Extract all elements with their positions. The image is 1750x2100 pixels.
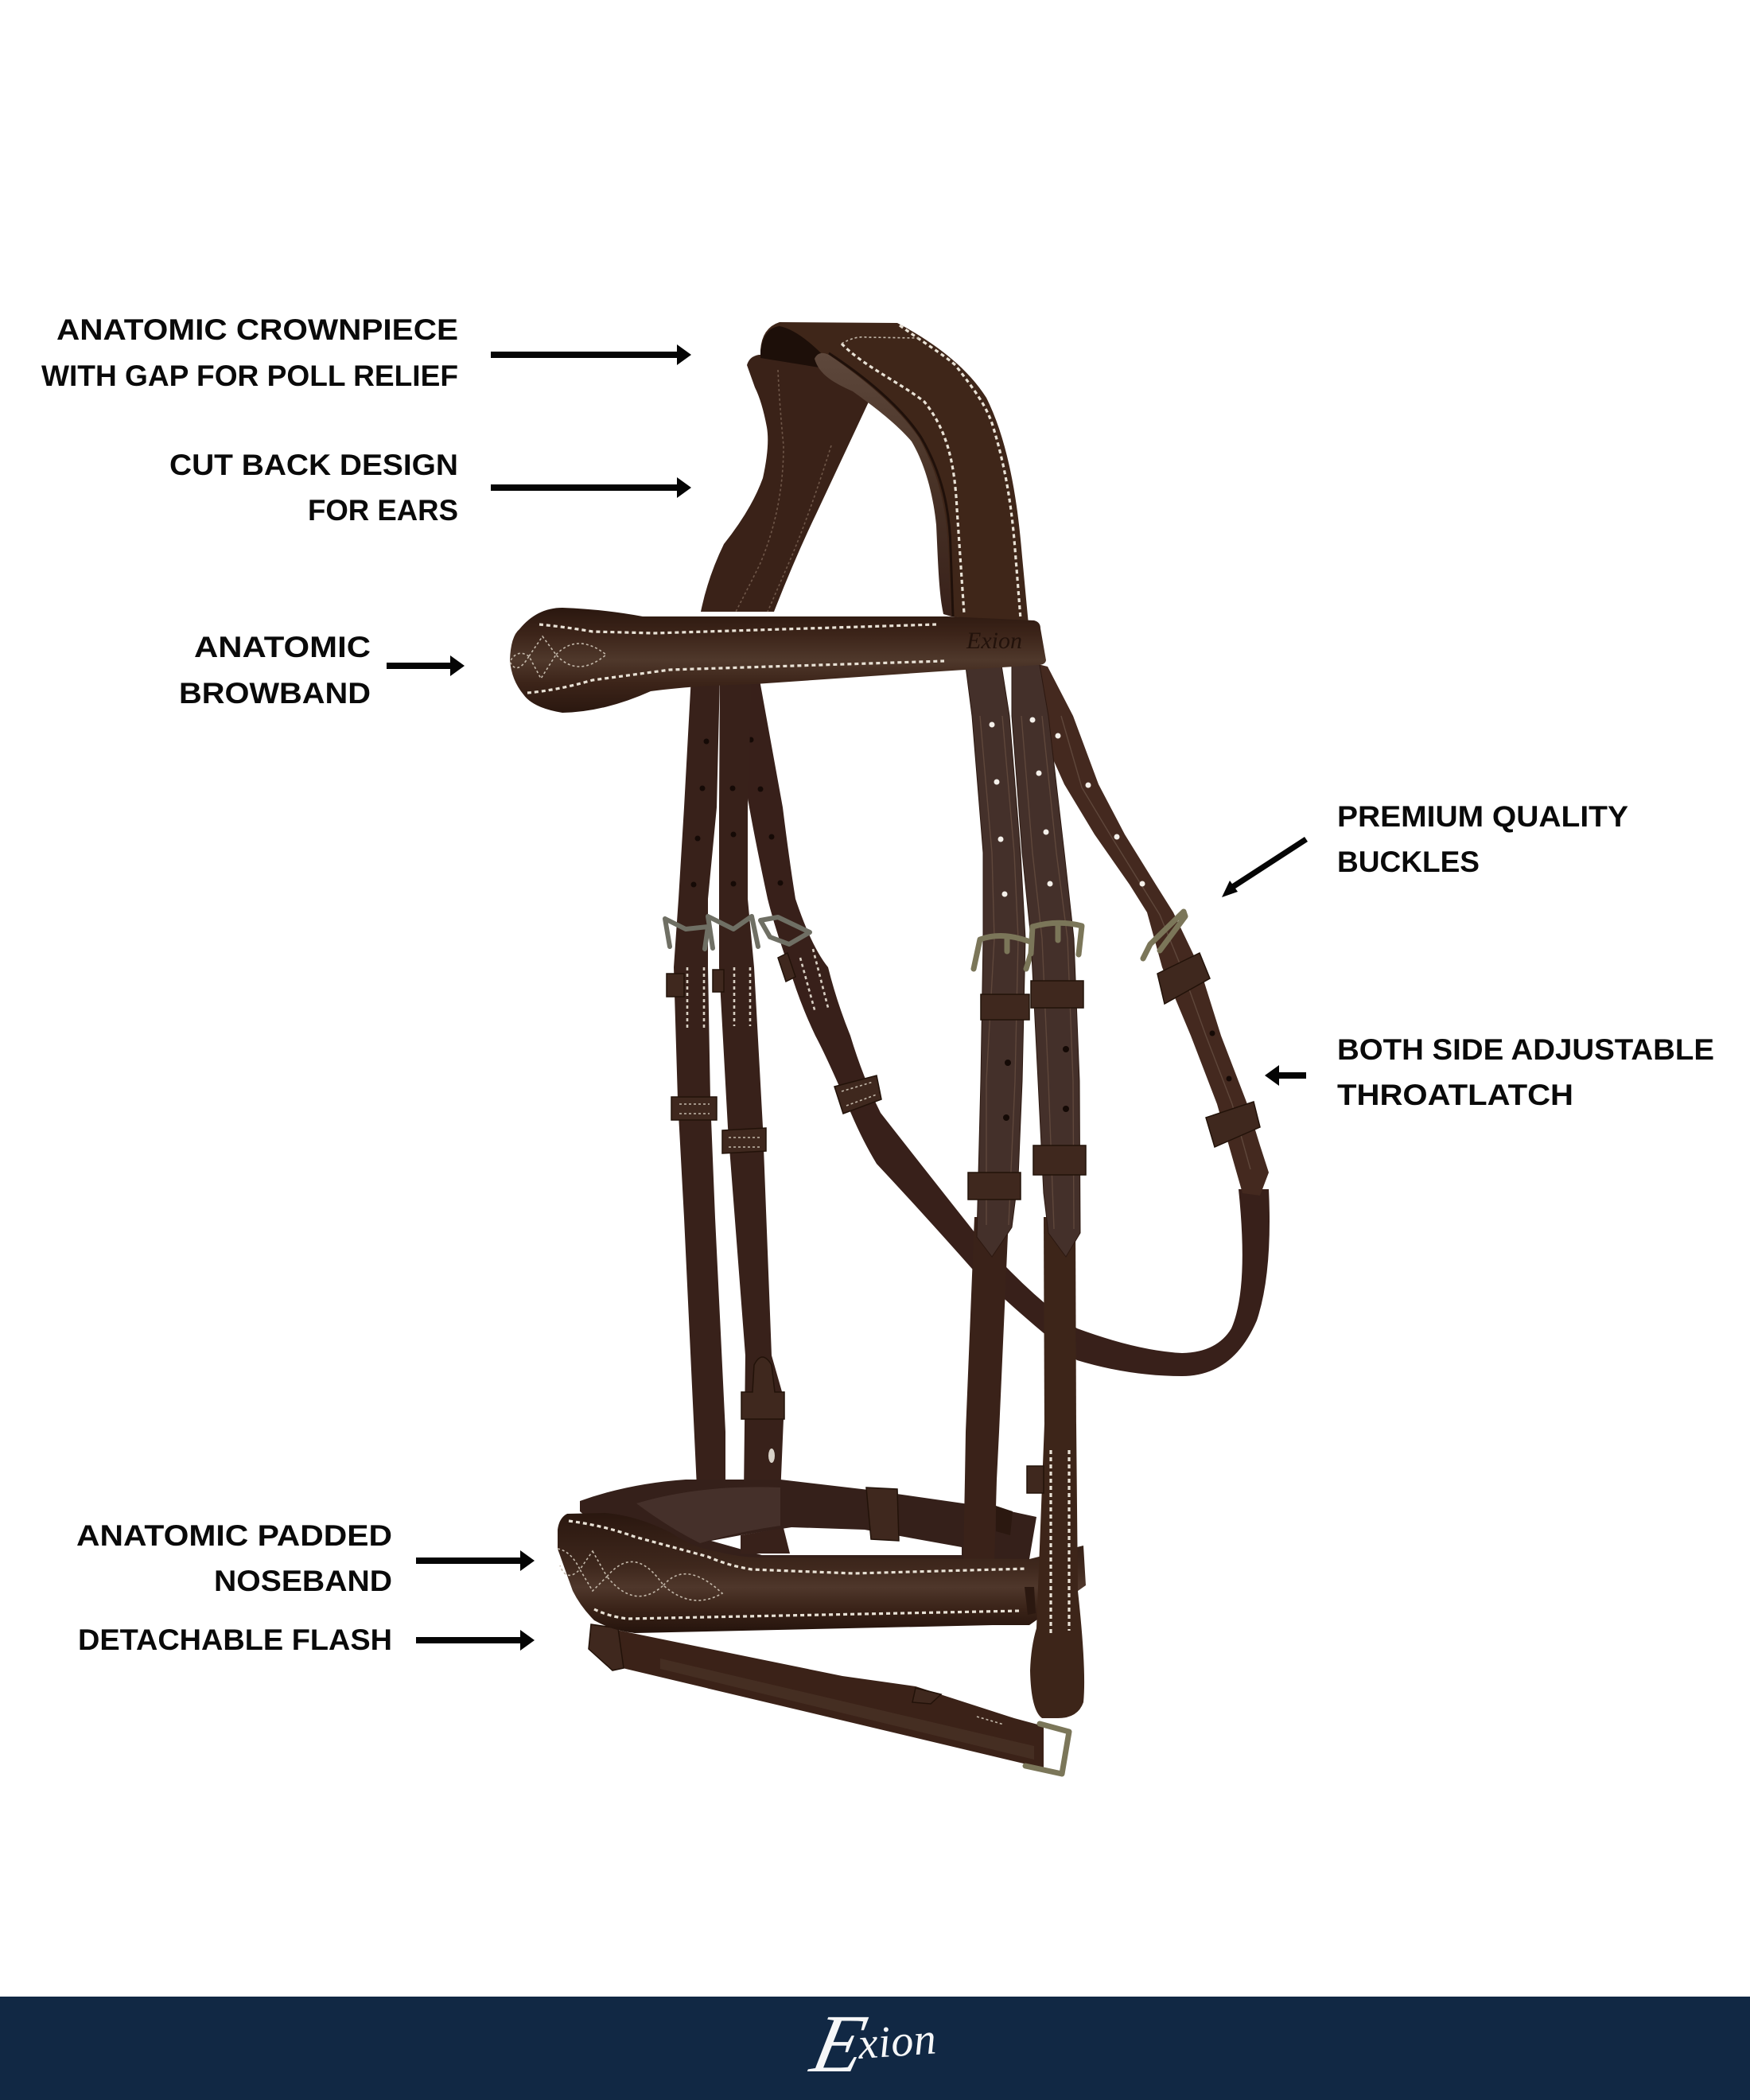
- label: premium quality buckles: [1337, 800, 1628, 878]
- lower right cheek straps: [965, 1217, 1009, 1480]
- label: anatomic browband: BROWBAND: [179, 677, 371, 710]
- bridle illustration: [510, 322, 1270, 1774]
- footer logo: E: [803, 1997, 874, 2090]
- label: both side adjustable throatlatch: BOTH SIDE ADJUSTABLE: [1337, 1033, 1714, 1066]
- left cheek straps: [665, 676, 784, 1495]
- label: premium quality buckles: BUCKLES: [1337, 846, 1480, 878]
- arrow: crownpiece: [491, 344, 691, 365]
- right cheek strap lower section: [963, 1480, 997, 1564]
- label: detachable flash: DETACHABLE FLASH: [78, 1624, 392, 1656]
- label: both side adjustable throatlatch: [1337, 1033, 1714, 1111]
- arrow: premium buckles: [1222, 837, 1308, 897]
- right cheek strap with buckle: [965, 660, 1034, 1257]
- padded crownpiece underside: [701, 355, 870, 612]
- footer logo: xion: [856, 2014, 938, 2069]
- label: anatomic padded noseband: ANATOMIC PADDED: [76, 1519, 392, 1552]
- label: anatomic crownpiece: ANATOMIC CROWNPIECE: [56, 313, 458, 346]
- label: cut back design: CUT BACK DESIGN: [169, 449, 458, 481]
- anatomic crownpiece strap: [760, 322, 1029, 624]
- label: anatomic padded noseband: NOSEBAND: [214, 1565, 392, 1597]
- detachable flash strap: [589, 1624, 1069, 1774]
- arrow: flash: [416, 1630, 535, 1651]
- footer bar: [0, 1997, 1750, 2100]
- label: cut back design: [169, 449, 458, 527]
- noseband rear padding: [580, 1480, 1036, 1559]
- label: premium quality buckles: PREMIUM QUALITY: [1337, 800, 1628, 833]
- arrow: cut back design: [491, 477, 691, 498]
- nose loop stitched strap: [1025, 1424, 1084, 1718]
- arrow: browband: [387, 655, 465, 676]
- second cheek strap with loop: [1012, 660, 1086, 1432]
- anatomic browband: Exion: [966, 628, 1022, 654]
- anatomic browband: [510, 608, 1046, 713]
- label: anatomic crownpiece: [41, 313, 458, 392]
- label: anatomic browband: [179, 631, 371, 710]
- crownpiece padding stitching: [736, 370, 831, 612]
- throatlatch long strap: [728, 680, 1270, 1376]
- label: anatomic crownpiece: WITH GAP FOR POLL RELIEF: [41, 360, 458, 392]
- footer logo: [803, 1997, 938, 2090]
- label: anatomic browband: ANATOMIC: [194, 631, 371, 663]
- right throatlatch strap: [1038, 664, 1269, 1196]
- anatomic padded noseband: [558, 1513, 1086, 1633]
- label: anatomic padded noseband: [76, 1519, 392, 1597]
- label: both side adjustable throatlatch: THROATLATCH: [1337, 1079, 1573, 1111]
- arrow: noseband: [416, 1550, 535, 1571]
- arrow: throatlatch: [1265, 1065, 1306, 1086]
- label: cut back design: FOR EARS: [308, 494, 458, 527]
